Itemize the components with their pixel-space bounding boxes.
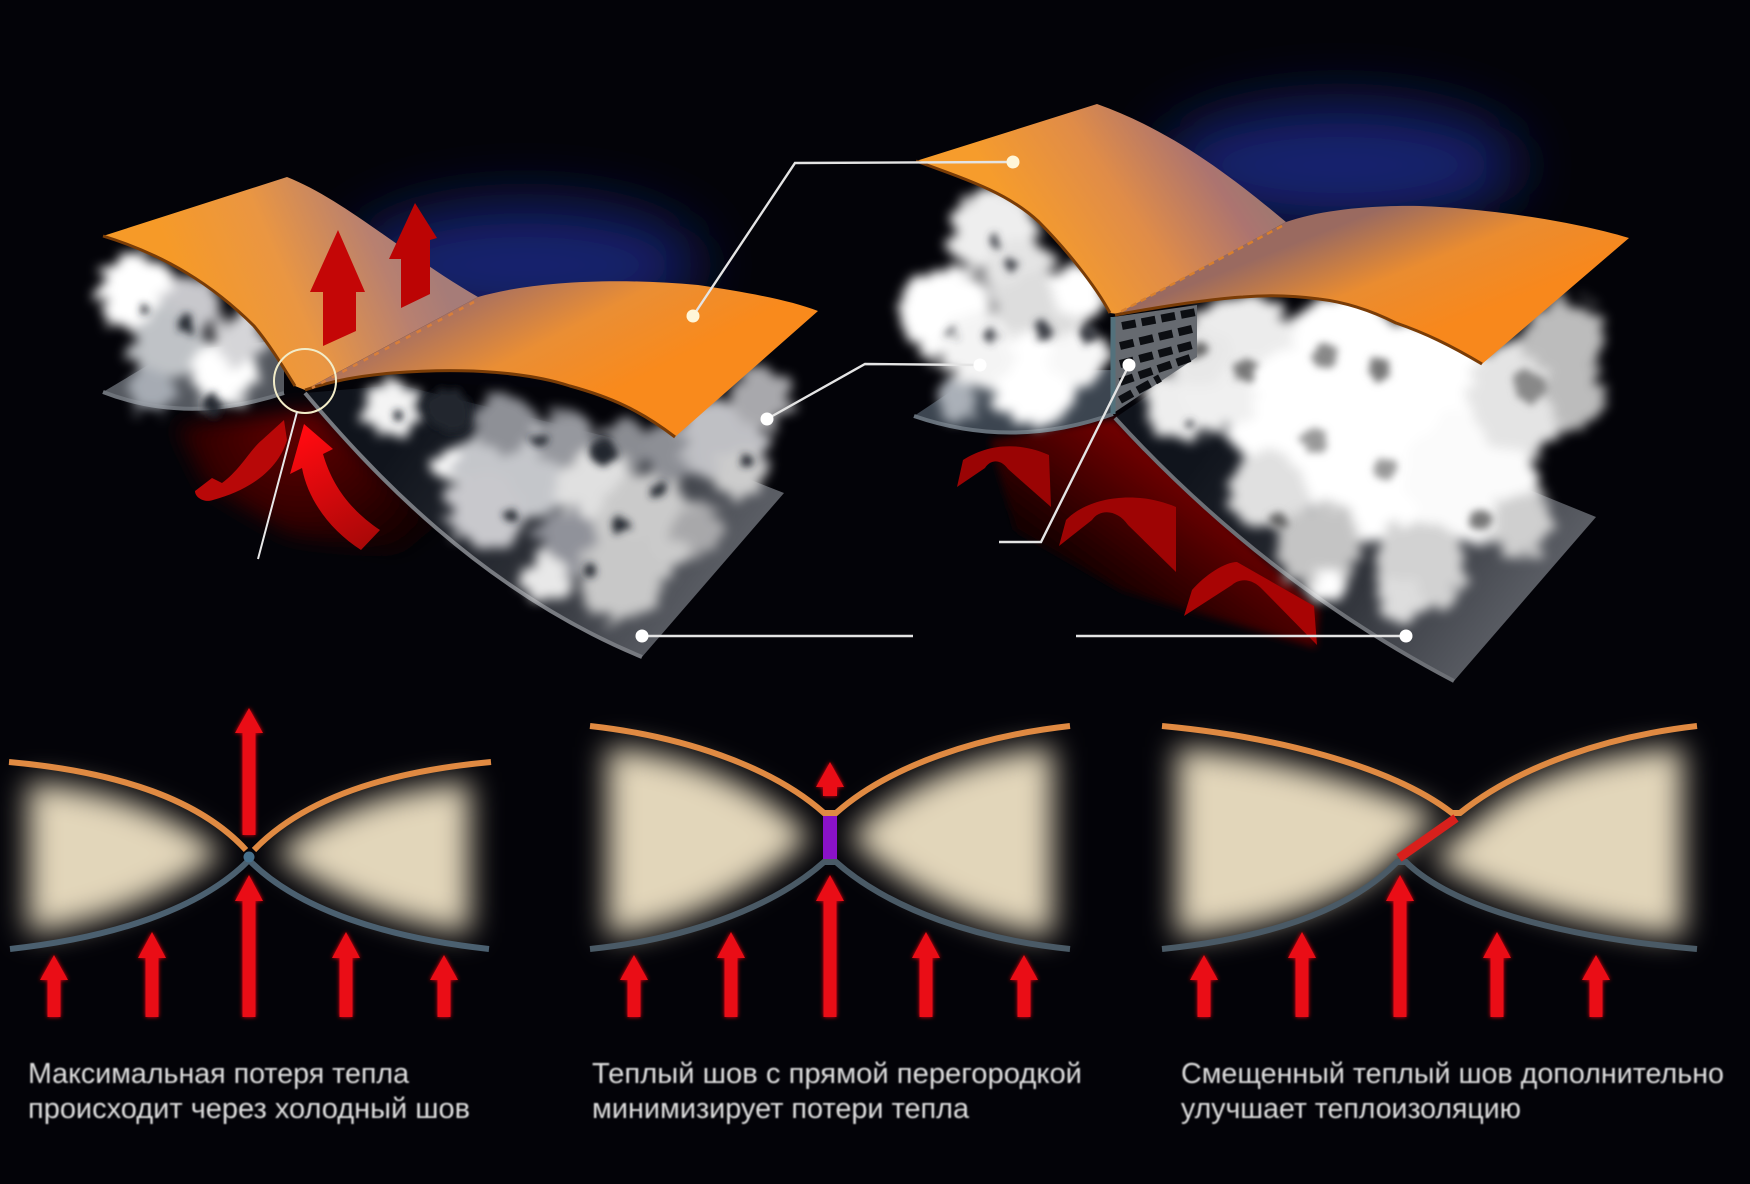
- panel: straight partition warm seam cross-section: [590, 726, 1090, 1125]
- insulation callout: [760, 358, 986, 426]
- blue cold glow: [1160, 103, 1520, 227]
- lining sheet: [103, 340, 784, 657]
- curved heat arrow large: [290, 424, 380, 550]
- outer shell line: [9, 762, 491, 850]
- lining sheet: [914, 360, 1596, 681]
- heat chevron 1: [957, 446, 1051, 507]
- callout leader lines and dots: [636, 156, 1412, 642]
- orange shell right: [305, 281, 818, 437]
- lining callout: [636, 630, 1412, 642]
- seam stitches: [312, 302, 474, 388]
- insulation fill: [607, 747, 1053, 936]
- shell callout: [686, 156, 1020, 322]
- feather dark mottling: [945, 234, 1546, 530]
- purple partition: [823, 816, 837, 859]
- shell edge shadow: [916, 161, 1482, 364]
- heat arrow up small: [389, 203, 437, 308]
- teal partition edge: [1110, 317, 1116, 414]
- seam stitches: [1120, 226, 1282, 312]
- panel: cold seam cross-section: [9, 708, 491, 1125]
- feather insulation: [901, 188, 1606, 624]
- red heat glow: [175, 410, 438, 552]
- heat chevron 3: [1184, 562, 1317, 645]
- orange shell left: [916, 104, 1286, 314]
- insulation fill: [28, 782, 470, 933]
- shell edge shadow: [103, 236, 675, 437]
- seam circle marker: [274, 349, 336, 413]
- outer shell line: [590, 726, 1070, 813]
- lining line: [1162, 862, 1697, 949]
- heat arrow up large: [310, 230, 365, 346]
- orange shell left: [103, 177, 478, 390]
- mesh partition: [1113, 305, 1197, 414]
- red offset partition: [1399, 818, 1456, 858]
- feather insulation: [99, 254, 790, 620]
- blue cold glow: [350, 203, 700, 327]
- panel: offset warm seam cross-section: [1162, 726, 1732, 1125]
- red heat glow: [990, 418, 1319, 648]
- caption: Теплый шов с прямой перегородкой: [592, 1058, 1082, 1090]
- feather dark mottling: [139, 304, 751, 576]
- heat arrows: [620, 762, 1038, 1017]
- orange shell right: [1115, 206, 1629, 364]
- caption: улучшает теплоизоляцию: [1181, 1093, 1521, 1125]
- seam leader line: [258, 412, 297, 559]
- panel: warm seam 3D jacket section: [901, 103, 1629, 681]
- panel: cold seam 3D jacket section: [99, 177, 818, 657]
- caption: Смещенный теплый шов дополнительно: [1181, 1058, 1724, 1090]
- caption: Максимальная потеря тепла: [28, 1058, 410, 1090]
- partition callout: [999, 358, 1136, 542]
- heat arrows: [40, 708, 458, 1017]
- caption: минимизирует потери тепла: [592, 1093, 970, 1125]
- heat chevron 2: [1059, 497, 1176, 572]
- caption: происходит через холодный шов: [28, 1093, 470, 1125]
- curved heat arrow small: [195, 420, 287, 501]
- lining line: [590, 862, 1070, 949]
- insulation fill: [1177, 747, 1683, 936]
- heat arrows: [1190, 875, 1610, 1017]
- lining line: [10, 860, 489, 949]
- outer shell line: [1162, 726, 1697, 813]
- seam point: [244, 852, 254, 862]
